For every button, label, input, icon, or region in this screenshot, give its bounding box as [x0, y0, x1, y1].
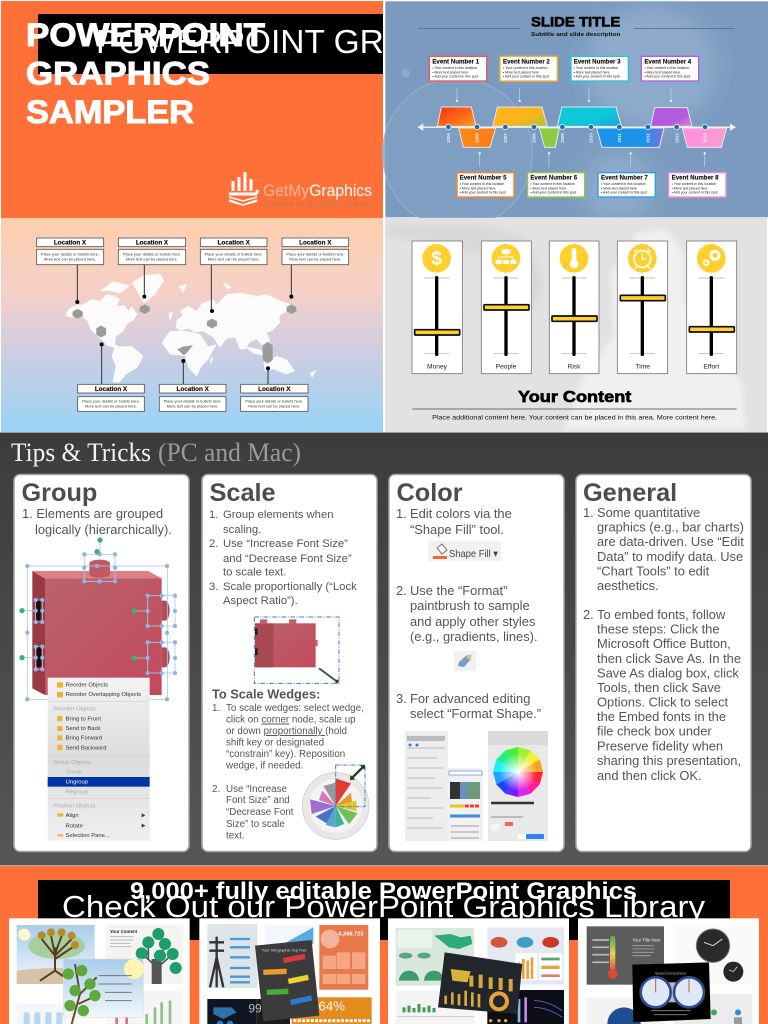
year labels: 2010 [589, 133, 594, 143]
event 5: • More text placed here [460, 186, 496, 190]
tips heading: (PC and Mac) [158, 438, 301, 467]
location boxes bottom: Location X [258, 386, 291, 393]
card: Scale: Size” to scale [226, 819, 285, 830]
card: General: and then click OK. [597, 768, 702, 783]
card: General: 2. [583, 607, 594, 622]
format paintbrush icon [454, 651, 476, 671]
event 3: Event Number 3 [574, 58, 621, 65]
year labels: 2005 [446, 133, 451, 143]
card: Scale: shift key or designated [226, 738, 324, 748]
panel: cover slide [1, 1, 383, 218]
event 6: • Your content in this location [530, 182, 575, 186]
event 7: • More text placed here [601, 186, 637, 190]
thumbnail: infographic posters [199, 918, 380, 1024]
card: Scale: Use “Increase Font Size” [223, 538, 348, 550]
event 7 [598, 173, 655, 197]
promo bold line: 9,000+ fully editable PowerPoint Graphics [130, 878, 637, 905]
context menu: Ungroup [66, 780, 88, 786]
year labels [446, 133, 708, 143]
location boxes top [37, 238, 349, 265]
card: Scale: 2. [209, 538, 218, 550]
card: General: then click Save As. In the [597, 651, 741, 666]
event 2: • More text placed here [503, 70, 539, 74]
card: Color: select “Format Shape.” [410, 706, 541, 721]
thumbnail: dashboards [388, 918, 569, 1024]
context menu: Group [66, 770, 82, 776]
card: Scale: Use “Increase [226, 784, 288, 795]
thin title text: POWERPOINT GRAPHICS SAMPLER [96, 24, 678, 61]
card: Scale: Scale proportionally (“Lock [223, 581, 357, 593]
thumbnail: infographic posters: 99 [248, 1001, 262, 1015]
location boxes bottom: More text can be placed here. [167, 403, 219, 408]
event 8: • Add your content in this spot [672, 191, 718, 195]
slider card: People: People [496, 363, 517, 370]
connector lines [457, 88, 705, 167]
world map [65, 273, 317, 383]
location boxes top: Location X [136, 239, 169, 246]
card: General: Tools, then click Save [597, 680, 721, 695]
event 6: • More text placed here [530, 186, 566, 190]
slider card: Money: $ [431, 249, 442, 270]
card: Scale [202, 474, 377, 852]
card: Scale: text. [226, 830, 245, 842]
context menu: Send to Back [66, 726, 100, 732]
event 5: • Your content in this location [460, 182, 504, 186]
planet and clouds backdrop [382, 7, 717, 228]
card: General: Data” to modify data. Use [597, 549, 743, 564]
red box group illustration and menu [22, 540, 175, 841]
event 1: • More text placed here [432, 70, 468, 74]
timeline nodes [446, 124, 708, 130]
slider card: People [481, 241, 531, 374]
slider card: Time [617, 241, 668, 374]
event 6: Event Number 6 [530, 174, 578, 181]
card: General: these steps: Click the [597, 622, 720, 636]
bold title: SAMPLER [26, 94, 194, 130]
card: Group: Group [22, 479, 97, 507]
location boxes bottom: Location X [176, 386, 210, 393]
year labels: 2014 [703, 133, 708, 143]
event 3: • Add your content in this spot [574, 75, 620, 79]
slider card: Risk [549, 241, 599, 374]
card: General: graphics (e.g., bar charts) [597, 520, 744, 534]
context menu [48, 678, 150, 841]
bold title: GRAPHICS [26, 56, 210, 92]
card: General: the Embed fonts in the [597, 709, 726, 724]
location boxes top: More text can be placed here. [126, 256, 178, 261]
event 1 [429, 56, 487, 81]
card: Color: 1. [396, 506, 407, 521]
event 1: • Add your content in this spot [432, 75, 478, 79]
card: Scale: 3. [209, 581, 218, 593]
card: Group [14, 474, 189, 852]
year labels: 2007 [503, 133, 508, 143]
card: Scale: 2. [212, 784, 220, 795]
card: Color: For advanced editing [410, 691, 530, 706]
card: Group: 1. Elements are grouped [22, 506, 163, 521]
card: General: Options. Click to select [597, 694, 729, 710]
event 4 [641, 56, 699, 81]
event 8: Event Number 8 [672, 174, 719, 181]
connector dots [457, 101, 705, 153]
slider card: Risk: Risk [568, 363, 581, 370]
timeline trapezoids [437, 107, 727, 147]
event 5: Event Number 5 [460, 174, 507, 181]
event 8 [669, 173, 726, 197]
event 2 [500, 56, 557, 81]
promo library line: Check Out our PowerPoint Graphics Library [62, 889, 706, 924]
slider card: Money [412, 241, 462, 374]
card: Color: Use the “Format” [410, 583, 507, 598]
card: Scale: Aspect Ratio”). [223, 595, 298, 607]
event 3 [571, 56, 628, 81]
thumbnail: infographic posters: Your Infographic Top Five [262, 947, 307, 952]
location boxes bottom: Place your details or bullets here. [245, 399, 303, 404]
event 7: • Your content in this location [601, 182, 646, 186]
thumbnail: infographic posters: 4,366,723 [338, 931, 364, 937]
card: General: “Chart Tools” to edit [597, 564, 710, 578]
event 2: Event Number 2 [503, 58, 550, 65]
location boxes bottom: Place your details or bullets here. [82, 399, 140, 404]
card: Scale: To scale wedges: select wedge, [226, 703, 364, 714]
event 7: • Add your content in this spot [601, 191, 647, 195]
year labels: 2012 [646, 133, 651, 143]
pin lines and dots [77, 265, 291, 384]
slider card: Effort: Effort [703, 363, 719, 370]
card: Color: “Shape Fill” tool. [410, 522, 504, 537]
card: General: Some quantitative [597, 505, 700, 520]
card: Scale: Font Size” and [226, 795, 290, 806]
card: General: file check box under [597, 724, 712, 738]
location boxes top: Location X [54, 239, 87, 246]
event 3: • More text placed here [574, 70, 610, 74]
heading: Your Content: Your Content [518, 389, 632, 406]
Shape Fill button [428, 541, 501, 561]
logo: GetMyGraphics [229, 172, 372, 209]
card: Scale: scaling. [223, 524, 261, 536]
slide title [418, 15, 735, 38]
location boxes bottom: Place your details or bullets here. [164, 399, 222, 404]
tips heading [11, 438, 301, 467]
card: Scale: Group elements when [223, 509, 334, 521]
slider card: Effort [687, 241, 737, 374]
location boxes top: More text can be placed here. [208, 256, 260, 261]
server icons [73, 304, 296, 363]
event 4: • Add your content in this spot [644, 75, 690, 79]
card: Scale: Scale [210, 479, 276, 507]
card: Color: Edit colors via the [410, 506, 512, 521]
slider card: Money: Money [427, 363, 448, 370]
bold title: POWERPOINT [26, 17, 265, 53]
event 6 [528, 173, 585, 197]
thumbnail: gauges and clocks: Speed Comparison [655, 972, 686, 976]
card: Color: 2. [396, 583, 407, 598]
location boxes bottom [78, 384, 308, 411]
wedge wheel illustration [302, 765, 369, 839]
panel: sliders slide [385, 218, 767, 432]
format shape panels [405, 731, 548, 841]
card: Color: and apply other styles [410, 614, 535, 629]
card: Scale: to scale text. [223, 566, 286, 578]
card: General [576, 474, 751, 852]
card: Color: 3. [396, 691, 407, 706]
panel: timeline slide [382, 1, 768, 228]
context menu: Reorder Objects [66, 682, 108, 688]
card: General: sharing this presentation, [597, 753, 741, 768]
year labels: 2006 [475, 133, 480, 143]
card: General: aesthetics. [597, 578, 659, 593]
card: Scale: 1. [212, 703, 220, 714]
card: Scale: 1. [209, 509, 218, 521]
slider card: Time: Time [635, 363, 650, 370]
thumbnail: gauges and clocks: Your Title Here [632, 937, 661, 942]
year labels: 2009 [560, 133, 565, 143]
location boxes top: Place your details or bullets here. [205, 252, 263, 257]
thumbnail: gauges and clocks [578, 918, 759, 1024]
card: Scale: and “Decrease Font Size” [223, 553, 352, 565]
context menu: Regroup [66, 789, 88, 795]
card: Group: logically (hierarchically). [35, 522, 172, 537]
event 8: • More text placed here [672, 186, 708, 190]
event 5 [457, 173, 514, 197]
context menu: Bring Forward [66, 736, 102, 742]
year labels: 2011 [617, 133, 622, 143]
caption: Place additional content here. Your content can be placed in this area. More content here. [432, 415, 718, 421]
event 8: • Your content in this location [672, 182, 716, 186]
year labels: 2008 [532, 133, 537, 143]
event 1: • Your content in this location [432, 66, 477, 70]
card: General: Save As dialog box, click [597, 666, 739, 680]
card: Color: Color [396, 479, 463, 507]
bold title [26, 22, 266, 124]
slide title: Subtitle and slide description [531, 32, 621, 38]
timeline axis [419, 125, 735, 130]
black promo bar [38, 880, 730, 940]
black title bar [38, 14, 383, 74]
card: Scale: or down proportionally (hold [226, 726, 347, 737]
location boxes top: Location X [299, 239, 332, 246]
card: Scale: “constrain” key). Reposition [226, 749, 345, 760]
card: General: General [583, 479, 677, 507]
location boxes top: More text can be placed here. [289, 256, 341, 261]
event 4: Event Number 4 [644, 58, 692, 65]
slide title: SLIDE TITLE [531, 15, 620, 30]
card: General: To embed fonts, follow [597, 607, 726, 622]
location boxes bottom: Location X [95, 386, 128, 393]
card: Scale: wedge, if needed. [225, 760, 303, 772]
card: General: Preserve fidelity when [597, 738, 723, 754]
year labels: 2013 [674, 133, 679, 143]
card: Color [389, 474, 564, 852]
context menu: Bring to Front [66, 716, 101, 722]
panel: world map slide [1, 218, 383, 432]
thumbnail: tree graphics [9, 918, 190, 1024]
card: Color: paintbrush to sample [410, 598, 530, 613]
location boxes top: Place your details or bullets here. [41, 252, 99, 257]
panel: tips and tricks [0, 432, 768, 866]
card: Scale: To Scale Wedges: [212, 686, 320, 702]
event 2: • Your content in this location [503, 66, 548, 70]
location boxes top: Location X [217, 239, 251, 246]
event 5: • Add your content in this spot [460, 191, 506, 195]
tips heading: Tips & Tricks [11, 438, 151, 467]
logo: GetMyGraphics: GetMyGraphics [263, 181, 372, 200]
event 6: • Add your content in this spot [530, 191, 576, 195]
card: General: Microsoft Office Button, [597, 636, 731, 651]
location boxes bottom: More text can be placed here. [85, 403, 137, 408]
context menu: Send Backward [66, 745, 106, 751]
thumbnail: infographic posters: 64% [318, 999, 345, 1014]
card: Scale: click on corner node, scale up [226, 714, 356, 726]
context menu: Selection Pane... [66, 833, 110, 839]
colour wheel [493, 747, 543, 797]
event 4: • Your content in this location [644, 66, 689, 70]
panel: library promo [0, 866, 768, 1024]
thumbnail: tree graphics: Your Content [110, 929, 138, 934]
context menu: Reorder Objects [53, 706, 96, 712]
event 1: Event Number 1 [432, 58, 480, 65]
card: General: 1. [583, 505, 594, 520]
ghost figure backdrop [387, 224, 746, 429]
location boxes top: Place your details or bullets here. [286, 252, 344, 257]
context menu: Rotate [66, 823, 83, 829]
event 4: • More text placed here [644, 70, 680, 74]
context menu: Position Objects [53, 803, 96, 809]
context menu: Reorder Overlapping Objects [66, 692, 141, 698]
card: General: are data-driven. Use “Edit [597, 534, 744, 549]
location boxes top: Place your details or bullets here. [123, 252, 181, 257]
card: Scale: “Decrease Font [226, 807, 294, 818]
context menu: Align [66, 813, 79, 819]
location boxes top: More text can be placed here. [44, 256, 96, 261]
event 7: Event Number 7 [601, 174, 648, 181]
scaled box illustration [254, 617, 339, 683]
context menu: Group Objects [53, 760, 91, 766]
event 3: • Your content in this location [574, 66, 618, 70]
Shape Fill button: Shape Fill ▾ [449, 548, 499, 560]
event 2: • Add your content in this spot [503, 75, 549, 79]
card: Color: (e.g., gradients, lines). [410, 629, 538, 644]
logo: GetMyGraphics: Powered by eLearning Brothers [263, 200, 372, 209]
location boxes bottom: More text can be placed here. [248, 403, 300, 408]
